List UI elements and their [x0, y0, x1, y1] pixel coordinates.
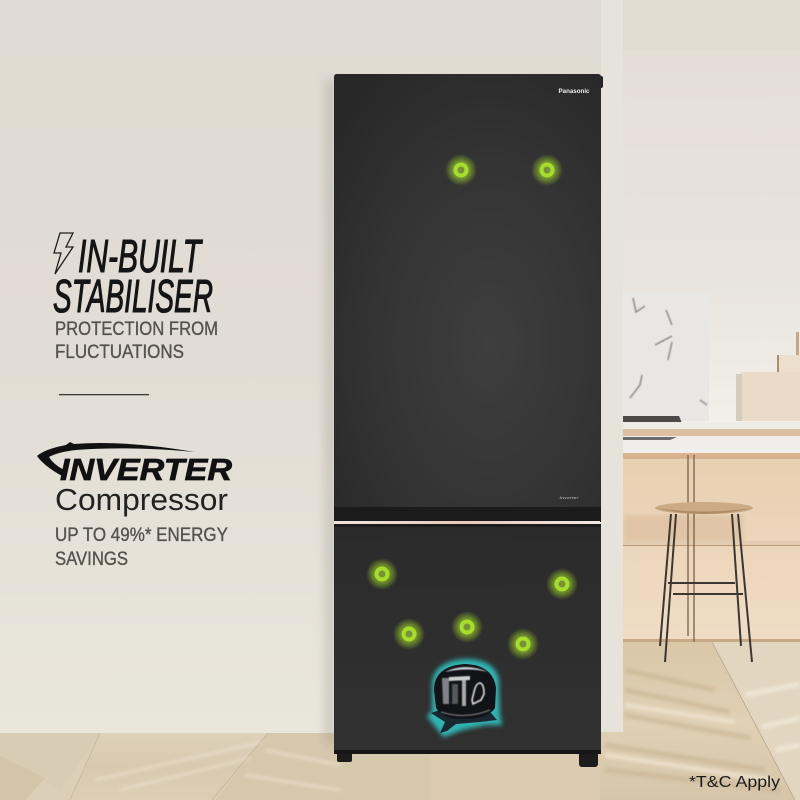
- divider line: [59, 394, 149, 395]
- top cap hinge: [595, 76, 603, 88]
- footnote: *T&C Apply: [689, 774, 780, 791]
- icon: lightning bolt: [54, 233, 73, 274]
- text: protection from fluctuations: PROTECTION FROM: [55, 319, 218, 340]
- text: protection from fluctuations: [55, 319, 218, 363]
- dot 2: [531, 154, 563, 186]
- dot 3: [366, 558, 398, 590]
- dot 4: [546, 568, 578, 600]
- pillar: [601, 0, 623, 732]
- lower door: [334, 527, 601, 750]
- logo: inverter: [37, 442, 233, 487]
- text: energy savings: UP TO 49%* ENERGY: [55, 525, 228, 546]
- floor: right herringbone planks: [600, 642, 800, 800]
- text: compressor: Compressor: [55, 482, 228, 517]
- brand logo: Panasonic: [558, 88, 590, 95]
- heading: in-built stabiliser: IN-BUILT: [78, 230, 203, 282]
- marble backsplash: [623, 293, 709, 421]
- fridge: [334, 74, 603, 767]
- dot 7: [507, 628, 539, 660]
- small inverter badge: Inverter: [560, 495, 579, 500]
- fridge feet: [337, 748, 598, 767]
- text: protection from fluctuations: FLUCTUATIONS: [55, 342, 184, 363]
- green indicator dots: [366, 154, 578, 660]
- panel: in-built stabiliser: [53, 230, 218, 363]
- logo: inverter: INVERTER: [60, 452, 233, 487]
- handle strip: [334, 521, 600, 524]
- cooktop: [623, 416, 682, 423]
- dot 1: [445, 154, 477, 186]
- heading: in-built stabiliser: STABILISER: [53, 270, 213, 322]
- dot 6: [451, 611, 483, 643]
- heading: in-built stabiliser: [53, 230, 213, 322]
- text: energy savings: [55, 525, 228, 570]
- kitchen alcove: [623, 0, 800, 662]
- wooden cabinet: [623, 453, 800, 642]
- stepped wooden boards: [736, 332, 800, 421]
- stool: [655, 502, 753, 662]
- icon: compressor: [428, 660, 501, 736]
- panel: inverter compressor: [37, 442, 233, 570]
- text: energy savings: SAVINGS: [55, 549, 128, 570]
- fridge shadow: [326, 80, 334, 745]
- upper door: [334, 74, 601, 508]
- dot 5: [393, 618, 425, 650]
- countertop and shelf: [623, 422, 800, 453]
- door gap: [334, 507, 601, 522]
- floor: left herringbone planks: [0, 733, 610, 800]
